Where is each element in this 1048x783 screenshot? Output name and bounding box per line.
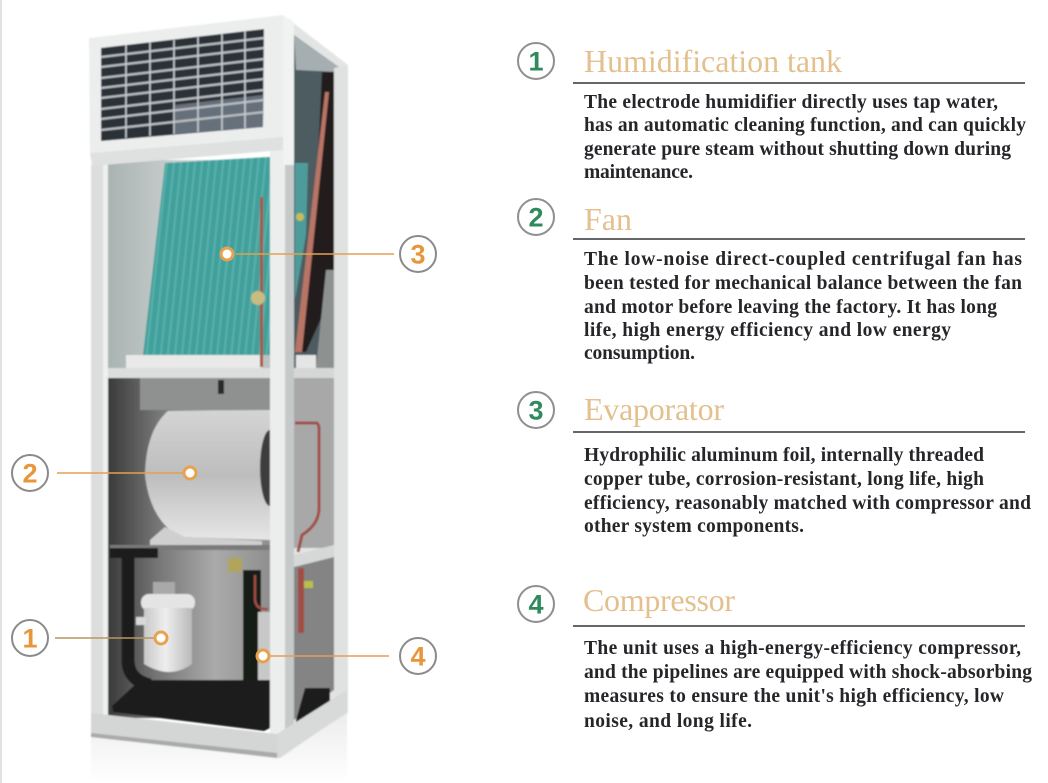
badge 3: 3 [528,396,544,426]
body text: generate pure steam without shutting down during [584,139,1011,160]
body text: The unit uses a high-energy-efficiency compressor, [584,638,1021,659]
body text: The electrode humidifier directly uses tap water, [584,92,998,113]
body text [584,638,1032,732]
badge 4: 4 [528,590,544,620]
body text: copper tube, corrosion-resistant, long life, high [584,469,984,490]
section 2: fan [518,199,1025,364]
body text: and motor before leaving the factory. It has long [584,297,997,318]
heading: Fan [584,201,632,237]
section 3: evaporator [518,391,1031,537]
heading: Humidification tank [584,43,842,79]
callout 1 [12,620,167,656]
compressor bay [110,545,270,731]
base rail [91,690,347,758]
heading: Compressor [583,582,735,618]
left edge strip [0,0,2,783]
body text: consumption. [584,343,695,364]
lower chamber interior [108,378,272,718]
body text: Hydrophilic aluminum foil, internally threaded [584,445,984,466]
body text: The low-noise direct-coupled centrifugal fan has [584,249,1022,270]
callout 3: 3 [410,240,426,270]
section 1: humidification tank [518,43,1026,183]
body text [584,92,1026,183]
front frame posts [91,65,348,740]
section 4: compressor [518,582,1032,732]
badge 1 [518,43,554,79]
evaporator coil [126,157,270,369]
body text: efficiency, reasonably matched with compressor and [584,493,1031,514]
callout 3 [221,236,436,272]
body text: life, high energy efficiency and low energy [584,320,951,341]
callout 1: 1 [22,624,38,654]
copper tube and valve [251,197,265,367]
cabinet side face [272,15,348,758]
badge 1: 1 [528,46,544,76]
grille [101,29,264,141]
callout 2: 2 [22,458,38,488]
floor shadow [91,712,347,783]
heading: Evaporator [584,391,724,427]
callout 4 [257,638,436,674]
badge 2: 2 [528,202,544,232]
badge 4 [518,586,554,622]
callout 2 [12,455,196,491]
body text: maintenance. [584,162,693,183]
body text: been tested for mechanical balance between the fan [584,273,1022,294]
body text [584,445,1031,537]
badge 2 [518,199,554,235]
fan mounting bracket [140,378,270,410]
shelf [106,368,274,378]
centrifugal fan [145,410,280,548]
upper chamber interior [108,160,272,370]
body text: other system components. [584,516,804,537]
badge 3 [518,392,554,428]
top hood with grille [89,15,294,166]
body text: measures to ensure the unit's high efficiency, low [584,686,1004,707]
body text: has an automatic cleaning function, and can quickly [584,115,1026,136]
body text: noise, and long life. [584,711,752,732]
illustration: air conditioner cabinet [89,15,348,783]
callout 4: 4 [410,642,426,672]
body text [584,249,1022,364]
humidification tank [136,582,195,672]
body text: and the pipelines are equipped with shock-absorbing [584,662,1032,683]
